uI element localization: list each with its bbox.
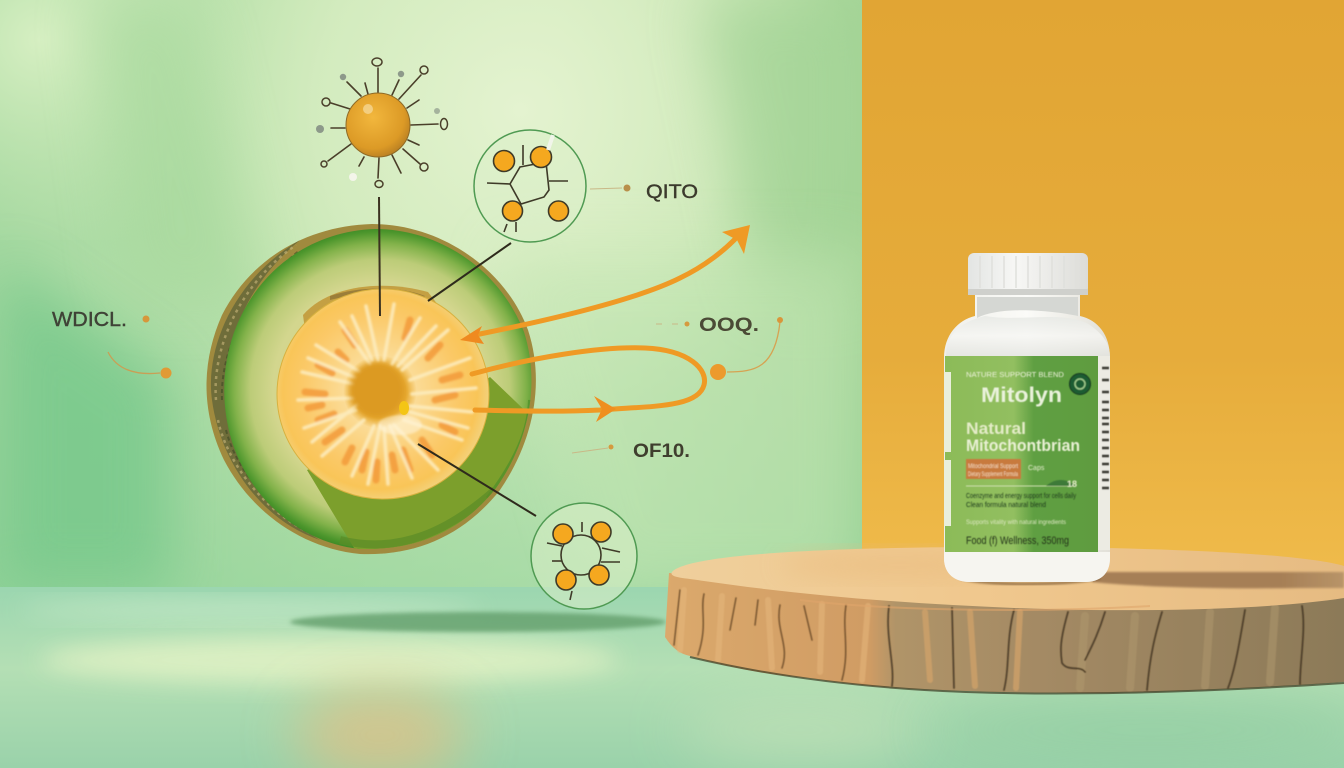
icon: seal — [1070, 374, 1090, 394]
icon: upper molecule circle — [474, 130, 586, 242]
melon flesh rim — [303, 286, 438, 330]
callout: OF10. — [572, 441, 690, 462]
bottle label: Mitolyn — [981, 384, 1062, 407]
callout: OOQ. — [656, 315, 783, 380]
line: melon to lower molecule — [418, 444, 536, 516]
panel: green wall background — [0, 0, 862, 590]
bottle label: 18 — [1067, 479, 1077, 489]
bottle neck and shoulder shading — [977, 297, 1078, 318]
icon: lower molecule circle — [531, 503, 637, 609]
wood top surface — [671, 547, 1344, 610]
bottle label: Natural — [966, 420, 1026, 438]
supplement bottle — [944, 253, 1110, 582]
callout: QITO — [590, 182, 698, 203]
panel: mint floor — [0, 587, 1344, 768]
melon shadow on floor — [290, 612, 666, 632]
sphere body — [346, 93, 410, 157]
bottle label: NATURE SUPPORT BLEND — [966, 372, 1064, 379]
bottle label: Mitochontbrian — [966, 437, 1080, 455]
panel: orange wall background — [862, 0, 1344, 590]
line: molecule to melon — [428, 243, 511, 301]
arrow: upward orange arrow — [460, 225, 750, 344]
callout: OOQ.: OOQ. — [699, 315, 759, 336]
barcode — [1102, 368, 1109, 488]
bottle label: Supports vitality with natural ingredients — [966, 520, 1066, 526]
melon skin — [206, 224, 536, 554]
orange badge: Mitochondrial Support — [968, 464, 1018, 470]
callout: WDICL.: WDICL. — [52, 309, 127, 331]
wood slice stand — [665, 547, 1344, 693]
bottle label: Coenzyme and energy support for cells daily — [966, 493, 1076, 500]
flesh ribs — [298, 304, 476, 484]
bottle label: Food (f) Wellness, 350mg — [966, 535, 1069, 547]
callout: WDICL. — [52, 309, 172, 378]
melon slice — [206, 224, 540, 554]
bottle label: Clean formula natural blend — [966, 502, 1046, 509]
arrow: looping orange arrow — [472, 348, 705, 422]
callout: OF10.: OF10. — [633, 441, 690, 462]
bottle body — [944, 295, 1110, 582]
wood bark side — [665, 573, 1344, 693]
icon: orange sphere with spokes — [316, 58, 448, 188]
dark floor contact line — [690, 657, 1344, 693]
bottle label: Caps — [1028, 465, 1045, 472]
melon core — [350, 363, 404, 417]
bottle shadow on wood — [1092, 572, 1344, 588]
orange badge — [966, 459, 1021, 479]
callout: QITO: QITO — [646, 182, 698, 203]
melon rind — [224, 229, 531, 549]
orange badge: Dietary Supplement Formula — [968, 472, 1018, 478]
bottle cap — [968, 253, 1088, 295]
line: sphere to melon — [379, 197, 380, 316]
melon flesh — [277, 289, 489, 499]
bottle label — [944, 356, 1110, 552]
